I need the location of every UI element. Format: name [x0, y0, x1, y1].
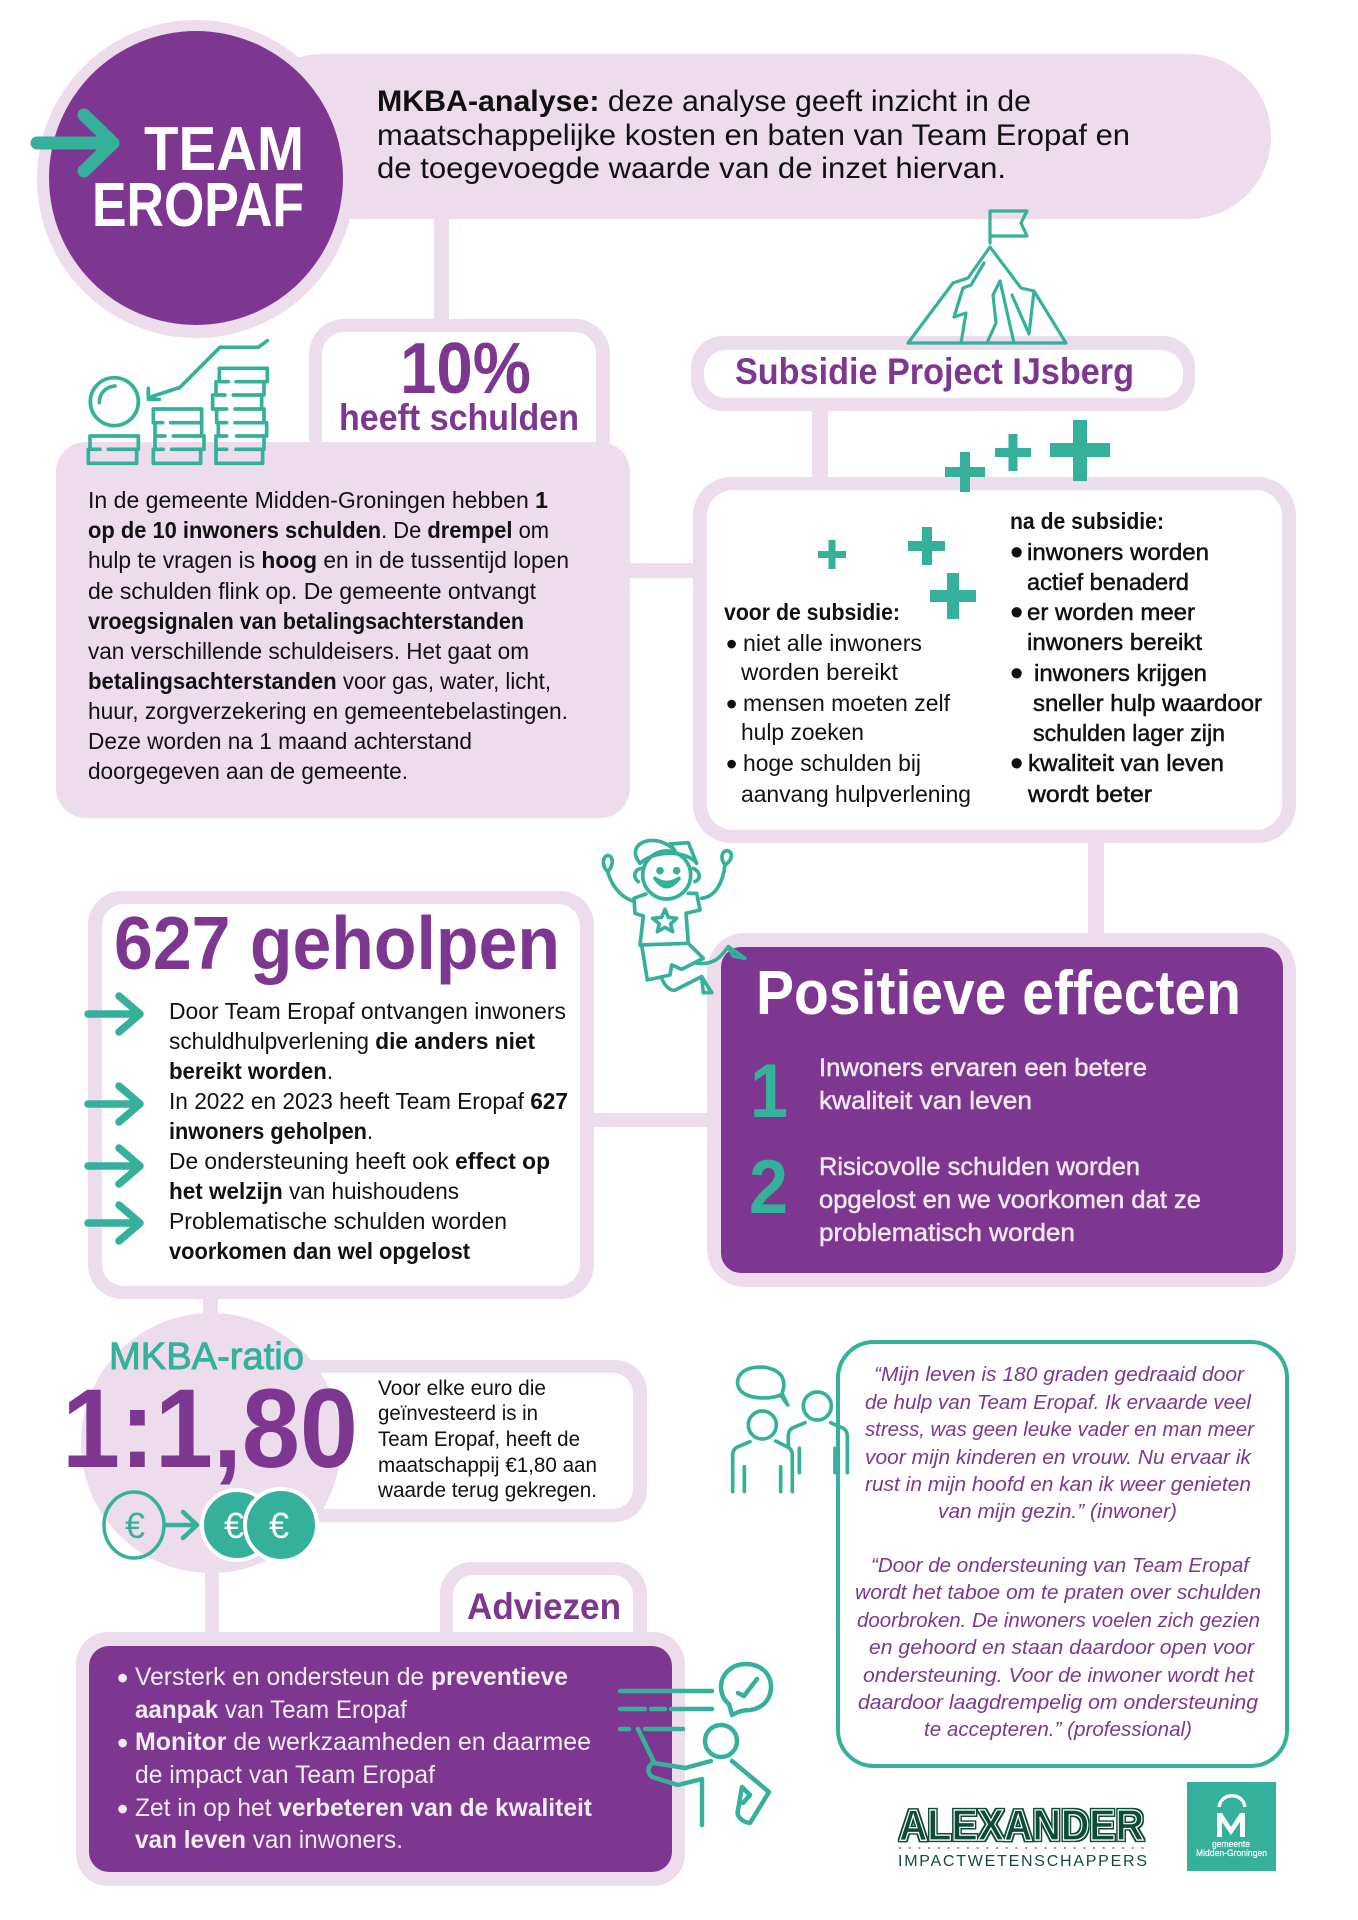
- title: Team Eropaf: TEAM: [144, 115, 304, 184]
- effect 2 text: [819, 1153, 1201, 1247]
- text: na de subsidie: •: [1010, 532, 1023, 574]
- quote: inwoner: stress, was geen leuke vader en man meer: [865, 1418, 1255, 1441]
- advice list: •: [117, 1660, 128, 1696]
- logo: gemeente Midden-Groningen: Midden-Groningen: [1196, 1848, 1267, 1859]
- number 1: 1: [750, 1049, 788, 1134]
- advice list: van leven van inwoners.: [135, 1826, 403, 1854]
- quote: professional: [855, 1554, 1261, 1741]
- quote: inwoner: [865, 1363, 1255, 1523]
- quote: professional: ondersteuning. Voor de inwoner wordt het: [863, 1664, 1255, 1687]
- quote: professional: daardoor laagdrempelig om ondersteuning: [858, 1691, 1259, 1714]
- effect 1 text: Inwoners ervaren een betere: [819, 1054, 1147, 1082]
- icons: plus signs: [818, 420, 1110, 619]
- advice list: •: [117, 1791, 128, 1827]
- body text: Deze worden na 1 maand achterstand: [88, 728, 472, 754]
- logo: gemeente Midden-Groningen: [1187, 1782, 1276, 1871]
- body text: de schulden flink op. De gemeente ontvangt: [88, 578, 537, 604]
- panel: schulden toelichting: [56, 442, 630, 818]
- body text: 627 geholpen: De ondersteuning heeft ook effect op: [169, 1148, 550, 1174]
- text: na de subsidie: inwoners worden: [1027, 539, 1209, 565]
- icon: euro coins: [104, 1489, 317, 1561]
- logo: Alexander Impactwetenschappers: IMPACTWETENSCHAPPERS: [898, 1853, 1147, 1870]
- advice list: Versterk en ondersteun de preventieve: [135, 1663, 568, 1691]
- effect 2 text: Risicovolle schulden worden: [819, 1153, 1140, 1181]
- text: na de subsidie: •: [1010, 743, 1023, 785]
- advice list: aanpak van Team Eropaf: [135, 1696, 407, 1724]
- body text: 627 geholpen: bereikt worden.: [169, 1058, 333, 1084]
- body text: In de gemeente Midden-Groningen hebben 1: [88, 487, 548, 513]
- quote: inwoner: “Mijn leven is 180 graden gedraaid door: [874, 1363, 1245, 1386]
- advice list: [117, 1660, 593, 1854]
- tab: Adviezen: [440, 1562, 647, 1662]
- panel: Adviezen: [76, 1632, 685, 1886]
- body text: 627 geholpen: Door Team Eropaf ontvangen inwoners: [169, 998, 566, 1024]
- heading: 627 geholpen: 627 geholpen: [114, 901, 560, 985]
- body text: doorgegeven aan de gemeente.: [88, 758, 408, 784]
- body text: 627 geholpen: In 2022 en 2023 heeft Team Eropaf 627: [169, 1088, 568, 1114]
- header banner: [240, 54, 1271, 219]
- number 2: 2: [749, 1145, 788, 1230]
- advice list: de impact van Team Eropaf: [135, 1761, 435, 1789]
- header description text: maatschappelijke kosten en baten van Team Eropaf en: [377, 119, 1130, 152]
- header description text: MKBA-analyse: deze analyse geeft inzicht in de: [377, 85, 1031, 118]
- body text: 627 geholpen: [169, 998, 568, 1264]
- logo: Alexander Impactwetenschappers: [898, 1801, 1147, 1870]
- icon: mountain with flag: [908, 211, 1066, 343]
- body text: [88, 487, 569, 784]
- text: na de subsidie: wordt beter: [1027, 781, 1152, 807]
- ratio number: 1:1,80: [62, 1366, 358, 1491]
- icons: arrows: [88, 996, 140, 1241]
- title: Team Eropaf: [92, 115, 304, 240]
- text: na de subsidie: [1010, 508, 1262, 807]
- text: voor de subsidie: hulp zoeken: [741, 719, 864, 745]
- icon: arrow: [37, 115, 113, 171]
- header description text: de toegevoegde waarde van de inzet hiervan.: [377, 152, 1006, 185]
- text: voor de subsidie: niet alle inwoners: [743, 630, 922, 656]
- circle: MKBA-ratio: [62, 1313, 358, 1573]
- effect 1 text: kwaliteit van leven: [819, 1087, 1032, 1115]
- advice list: Zet in op het verbeteren van de kwaliteit: [135, 1794, 593, 1822]
- advice list: Monitor de werkzaamheden en daarmee: [135, 1728, 591, 1756]
- heading: MKBA-ratio: MKBA-ratio: [109, 1336, 304, 1378]
- text: na de subsidie: inwoners bereikt: [1027, 629, 1203, 655]
- heading: Adviezen: Adviezen: [467, 1586, 621, 1627]
- text: na de subsidie: inwoners krijgen: [1034, 660, 1207, 686]
- text: na de subsidie: kwaliteit van leven: [1028, 750, 1224, 776]
- subheading: heeft schulden: heeft schulden: [339, 397, 579, 438]
- text: voor de subsidie: •: [726, 746, 737, 782]
- body text: 627 geholpen: inwoners geholpen.: [169, 1118, 373, 1144]
- body text: betalingsachterstanden voor gas, water, licht,: [88, 668, 551, 694]
- heading: Positieve effecten: Positieve effecten: [756, 959, 1241, 1028]
- body text: 627 geholpen: schuldhulpverlening die anders niet: [169, 1028, 535, 1054]
- quote: inwoner: voor mijn kinderen en vrouw. Nu ervaar ik: [865, 1446, 1253, 1469]
- panel: Positieve effecten: [707, 933, 1296, 1287]
- quote: inwoner: de hulp van Team Eropaf. Ik ervaarde veel: [865, 1391, 1252, 1414]
- panel: 627 geholpen: [88, 891, 594, 1299]
- text: uitleg ratio: Voor elke euro die: [378, 1377, 546, 1400]
- quote: professional: en gehoord en staan daardoor open voor: [869, 1636, 1255, 1659]
- text: na de subsidie: er worden meer: [1027, 599, 1195, 625]
- effect 2 text: opgelost en we voorkomen dat ze: [819, 1186, 1201, 1214]
- icon: two people talking: [733, 1367, 847, 1492]
- body text: vroegsignalen van betalingsachterstanden: [88, 608, 524, 634]
- text: na de subsidie: •: [1010, 592, 1023, 634]
- text: voor de subsidie: [724, 599, 971, 807]
- quote: professional: “Door de ondersteuning van Team Eropaf: [871, 1554, 1251, 1577]
- text: voor de subsidie: voor de subsidie:: [724, 599, 900, 625]
- text: voor de subsidie: hoge schulden bij: [743, 750, 921, 776]
- body text: huur, zorgverzekering en gemeentebelastingen.: [88, 698, 568, 724]
- body text: hulp te vragen is hoog en in de tussentijd lopen: [88, 547, 569, 573]
- text: na de subsidie: •: [1010, 653, 1023, 695]
- text: uitleg ratio: Team Eropaf, heeft de: [378, 1428, 580, 1451]
- panel: uitleg MKBA-ratio: [280, 1360, 647, 1522]
- panel: Subsidie Project IJsberg: [691, 336, 1195, 411]
- text: uitleg ratio: waarde terug gekregen.: [377, 1479, 597, 1502]
- panel: 10% heeft schulden: [309, 319, 610, 469]
- advice list: •: [117, 1725, 128, 1761]
- heading: 10%: 10%: [400, 329, 531, 409]
- icon: euro coins: €: [224, 1505, 244, 1546]
- quote: professional: te accepteren.” (professional): [924, 1718, 1192, 1741]
- effect 2 text: problematisch worden: [819, 1219, 1075, 1247]
- text: voor de subsidie: worden bereikt: [740, 659, 899, 685]
- panel: voor en na de subsidie: [693, 477, 1296, 843]
- quote: inwoner: rust in mijn hoofd en kan ik weer genieten: [865, 1473, 1251, 1496]
- text: uitleg ratio: geïnvesteerd is in: [378, 1402, 538, 1425]
- text: na de subsidie: actief benaderd: [1027, 569, 1189, 595]
- text: voor de subsidie: aanvang hulpverlening: [741, 781, 971, 807]
- body text: van verschillende schuldeisers. Het gaat om: [88, 638, 529, 664]
- text: voor de subsidie: •: [726, 686, 737, 722]
- body text: 627 geholpen: Problematische schulden worden: [169, 1208, 507, 1234]
- body text: 627 geholpen: het welzijn van huishoudens: [169, 1178, 459, 1204]
- connector lines between panels: [203, 210, 1104, 1640]
- icon: coins with arrow: [88, 341, 267, 463]
- icon: euro coins: €: [269, 1505, 289, 1546]
- text: na de subsidie: schulden lager zijn: [1033, 720, 1225, 746]
- title: Team Eropaf: EROPAF: [92, 171, 304, 240]
- quote: professional: wordt het taboe om te praten over schulden: [855, 1581, 1261, 1604]
- logo circle: Team Eropaf: [37, 20, 355, 338]
- logo: gemeente Midden-Groningen: gemeente: [1212, 1839, 1250, 1850]
- quote: professional: doorbroken. De inwoners voelen zich gezien: [857, 1609, 1260, 1632]
- icon: euro coins: €: [125, 1505, 145, 1546]
- text: uitleg ratio: [377, 1377, 597, 1502]
- quote: inwoner: van mijn gezin.” (inwoner): [938, 1500, 1177, 1523]
- text: na de subsidie: sneller hulp waardoor: [1033, 690, 1262, 716]
- text: voor de subsidie: •: [726, 626, 737, 662]
- body text: op de 10 inwoners schulden. De drempel om: [88, 517, 549, 543]
- icon: person with checklist: [620, 1664, 771, 1825]
- heading: Subsidie Project IJsberg: Subsidie Project IJsberg: [735, 351, 1134, 392]
- effect 1 text: [819, 1054, 1147, 1115]
- text: uitleg ratio: maatschappij €1,80 aan: [378, 1454, 597, 1477]
- body text: 627 geholpen: voorkomen dan wel opgelost: [169, 1238, 470, 1264]
- header description text: [377, 85, 1130, 185]
- icon: jumping child: [603, 840, 745, 993]
- text: na de subsidie: na de subsidie:: [1010, 508, 1164, 534]
- logo: Alexander Impactwetenschappers: ALEXANDER: [899, 1801, 1144, 1850]
- panel: quotes: [838, 1342, 1287, 1766]
- text: voor de subsidie: mensen moeten zelf: [743, 690, 951, 716]
